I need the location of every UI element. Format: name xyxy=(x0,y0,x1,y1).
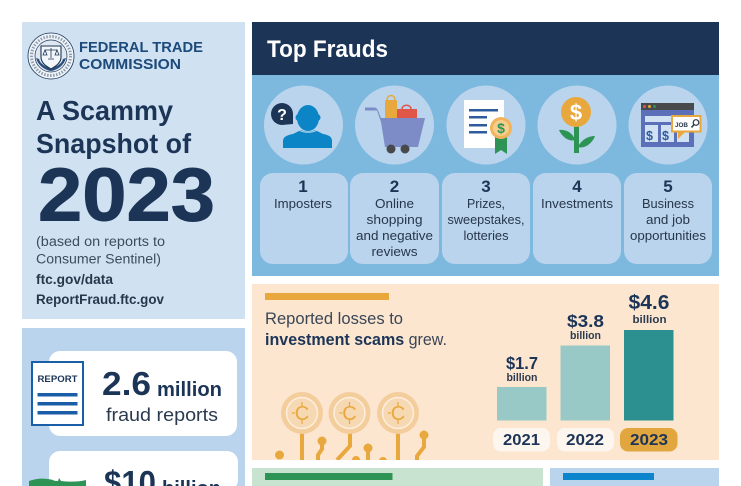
bar chart xyxy=(493,292,678,452)
card: fraud reports: million xyxy=(157,379,222,401)
icon: money plant: $ xyxy=(570,100,582,125)
item 2: online shopping: 2 xyxy=(390,177,399,196)
icon: cash xyxy=(29,478,86,486)
item 5: business and job opportunities: opportunities xyxy=(630,228,706,243)
links: ftc.gov/data xyxy=(36,272,113,287)
heading: Snapshot of xyxy=(36,128,192,159)
bar: 2023 xyxy=(620,292,678,452)
source note: (based on reports to xyxy=(36,234,165,249)
bar: 2022: billion xyxy=(570,330,601,342)
source note: Consumer Sentinel) xyxy=(36,252,161,266)
bar: 2023: 2023 xyxy=(630,432,668,449)
heading xyxy=(252,22,719,75)
item 2: online shopping: Online xyxy=(375,196,414,211)
card: fraud reports xyxy=(32,351,237,436)
bar: 2023: billion xyxy=(632,314,667,326)
icon: crypto coins circuit: C xyxy=(295,403,309,425)
icon: crypto coins circuit xyxy=(275,392,428,465)
panel: green section xyxy=(252,468,543,486)
item 1: imposters: Imposters xyxy=(274,196,333,211)
icon: job website: JOB xyxy=(675,122,688,129)
bar: 2022 xyxy=(557,311,614,452)
item 4: investments: Investments xyxy=(541,196,614,211)
panel: totals xyxy=(22,328,245,486)
logo text xyxy=(79,39,203,73)
bar: 2023: $4.6 xyxy=(628,292,670,314)
item 5: business and job opportunities: 5 xyxy=(663,177,673,196)
item 4: investments: 4 xyxy=(572,177,582,196)
item 5: business and job opportunities: Business xyxy=(642,196,694,211)
item 3: prizes: Prizes, xyxy=(467,196,505,211)
bar: 2021 xyxy=(493,353,550,452)
icon: report: REPORT xyxy=(38,374,78,385)
heading: A Scammy xyxy=(36,95,173,126)
item 3: prizes xyxy=(442,86,530,264)
panel: title xyxy=(22,22,245,319)
heading xyxy=(36,95,192,159)
bar: 2022: 2022 xyxy=(566,432,604,449)
item 4: investments xyxy=(533,86,621,264)
icon: crypto coins circuit: C xyxy=(342,403,357,425)
links: ReportFraud.ftc.gov xyxy=(36,292,164,307)
item 2: online shopping: and negative xyxy=(356,228,433,243)
icon: crypto coins circuit: C xyxy=(391,403,405,425)
icon: job website: $ xyxy=(662,129,669,143)
icon: imposter: ? xyxy=(277,107,287,124)
item 3: prizes: 3 xyxy=(481,177,491,196)
item 1: imposters xyxy=(260,86,348,264)
bar: 2021: $1.7 xyxy=(506,353,538,373)
bar: 2021: billion xyxy=(506,372,538,384)
panel: investment scams xyxy=(252,284,719,465)
item 5: business and job opportunities xyxy=(624,86,712,264)
item 2: online shopping: shopping xyxy=(366,212,422,227)
icon: job website: $ xyxy=(646,129,653,143)
panel: top frauds xyxy=(252,22,719,276)
logo text: FEDERAL TRADE xyxy=(79,39,203,56)
logo text: COMMISSION xyxy=(79,56,181,73)
source note xyxy=(36,234,165,266)
bar: 2021: 2021 xyxy=(503,432,540,449)
icon: prize certificate xyxy=(464,100,512,154)
bar: 2022: $3.8 xyxy=(567,311,604,331)
icon: cart xyxy=(365,96,425,154)
card: fraud reports: fraud reports xyxy=(106,404,218,425)
item 5: business and job opportunities: and job xyxy=(646,212,690,227)
icon: job website xyxy=(641,103,700,147)
stat: 2.6 xyxy=(102,365,151,402)
text block: Reported losses to xyxy=(265,310,403,328)
panel: blue section xyxy=(550,468,719,486)
item 1: imposters: 1 xyxy=(298,177,308,196)
item 3: prizes: lotteries xyxy=(464,228,509,243)
text block xyxy=(265,310,447,349)
card: losses xyxy=(29,451,238,486)
item 2: online shopping xyxy=(350,86,439,264)
icon: report xyxy=(32,362,83,425)
text block: investment scams grew. xyxy=(265,331,447,349)
icon: imposter xyxy=(271,103,332,148)
year: 2023 xyxy=(38,152,215,236)
icon: prize certificate: $ xyxy=(497,120,505,136)
item 3: prizes: sweepstakes, xyxy=(448,212,524,227)
heading: Top Frauds xyxy=(267,36,388,63)
links xyxy=(36,272,164,307)
icon: money plant xyxy=(559,97,595,153)
item 2: online shopping: reviews xyxy=(372,244,418,259)
icon: FTC seal xyxy=(28,33,74,79)
